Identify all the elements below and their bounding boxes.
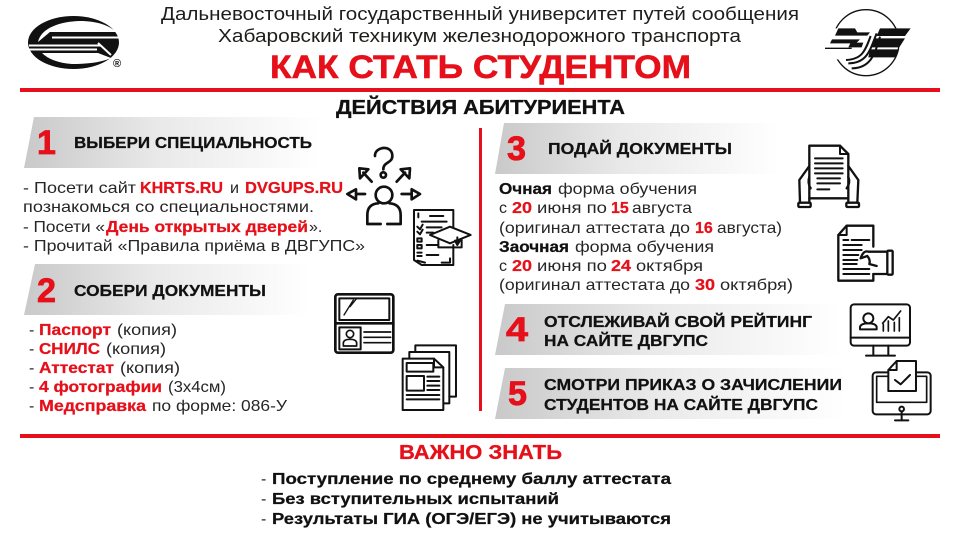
step 3 text: correspondence: июня по [537, 258, 607, 275]
step 2 list: СНИЛС [39, 341, 100, 358]
panel: step 3 [495, 123, 793, 294]
step 2 list: (3х4см) [168, 379, 226, 396]
panel: step 2 [24, 264, 310, 415]
step 3 text: full-time: августа [632, 200, 692, 217]
step 2 list: 4 фотографии [39, 379, 162, 396]
step 3 text: correspondence: Заочная [499, 239, 569, 256]
step 1 text [23, 180, 365, 255]
step 3 text: correspondence: 20 [512, 258, 532, 275]
step 2 list: - [29, 360, 34, 377]
number 5: 5 [508, 375, 527, 413]
header: university name [161, 4, 799, 46]
step 1 text: DVGUPS.RU [245, 180, 343, 197]
step 1 text: - Прочитай «Правила приёма в ДВГУПС» [23, 238, 365, 255]
step 1 text: познакомься со специальностями. [23, 199, 314, 216]
step 3 text: full-time: августа) [717, 220, 782, 237]
banner: step 3 [495, 123, 780, 174]
header: university name: Хабаровский техникум железнодорожного транспорта [218, 26, 742, 46]
logo: railway oval [28, 16, 121, 70]
step 4 heading [544, 312, 812, 350]
step 3 text: correspondence [499, 239, 793, 294]
step 2 list: по форме: 086-У [152, 398, 288, 415]
panel: step 5 [495, 368, 845, 419]
step 2 list [29, 322, 288, 415]
step 3 text: full-time: (оригинал аттестата до [499, 220, 690, 237]
step 2 list: (копия) [106, 341, 166, 358]
panel: step 1 [23, 117, 365, 255]
step 3 text: full-time: форма обучения [558, 181, 697, 198]
important facts list: - [261, 511, 266, 528]
icon: passport [335, 294, 393, 353]
step 3 text: full-time [499, 181, 782, 237]
step 1 text: День открытых дверей [106, 219, 308, 236]
vertical divider [479, 128, 482, 411]
step 1 heading: ВЫБЕРИ СПЕЦИАЛЬНОСТЬ [74, 135, 312, 152]
step 2 list: (копия) [120, 360, 180, 377]
banner: step 4 [495, 304, 840, 355]
step 2 list: - [29, 398, 34, 415]
icon: monitor with rating chart [851, 304, 910, 356]
step 3 text: full-time: с [499, 200, 507, 217]
important facts list: Без вступительных испытаний [272, 491, 559, 508]
icon: person choosing with question mark [347, 148, 420, 224]
step 3 text: correspondence: 30 [695, 277, 715, 294]
step 3 text: correspondence: форма обучения [575, 239, 714, 256]
step 3 text: correspondence: (оригинал аттестата до [499, 277, 690, 294]
step 3 text: correspondence: октября [636, 258, 703, 275]
icon: stack of documents [403, 345, 456, 410]
step 1 text: KHRTS.RU [140, 180, 223, 197]
step 2 heading: СОБЕРИ ДОКУМЕНТЫ [74, 283, 266, 300]
step 5 heading [544, 377, 842, 414]
logo: railway oval: ® [113, 58, 121, 70]
step 3 text: full-time: 15 [611, 200, 629, 217]
step 5 heading: СМОТРИ ПРИКАЗ О ЗАЧИСЛЕНИИ [544, 377, 842, 394]
panel: step 4 [495, 304, 840, 355]
step 3 text: full-time: 16 [695, 220, 713, 237]
important facts list: - [261, 471, 266, 488]
heading: important to know: ВАЖНО ЗНАТЬ [399, 442, 562, 464]
step 1 text: - Посети сайт [23, 180, 137, 197]
step 5 heading: СТУДЕНТОВ НА САЙТЕ ДВГУПС [544, 395, 818, 414]
step 1 text: ». [309, 219, 322, 236]
step 3 text: correspondence: октября) [720, 277, 793, 294]
icon: hands holding document [798, 146, 859, 207]
logo: railway circle [823, 10, 913, 76]
step 2 list: (копия) [117, 322, 177, 339]
number 4: 4 [506, 311, 528, 349]
step 2 list: Паспорт [39, 322, 111, 339]
banner: step 2 [24, 264, 310, 315]
important facts list: - [261, 491, 266, 508]
step 3 text: full-time: июня по [537, 200, 607, 217]
icon: hand with document [838, 226, 893, 281]
top divider [20, 88, 940, 92]
step 4 heading: НА САЙТЕ ДВГУПС [544, 331, 708, 350]
title: КАК СТАТЬ СТУДЕНТОМ [270, 49, 691, 85]
number 3: 3 [507, 130, 526, 168]
step 2 list: Медсправка [39, 398, 146, 415]
step 1 text: и [230, 180, 239, 197]
banner: step 5 [495, 368, 845, 419]
step 2 list: - [29, 379, 34, 396]
bottom divider [20, 434, 940, 438]
banner: step 1 [24, 117, 320, 168]
important facts list: Результаты ГИА (ОГЭ/ЕГЭ) не учитываются [272, 511, 671, 528]
icon: checklist with graduation cap [414, 210, 471, 265]
number 1: 1 [37, 124, 56, 162]
step 3 text: full-time: 20 [512, 200, 532, 217]
icon: monitor with approved document [873, 361, 931, 420]
important facts list: Поступление по среднему баллу аттестата [272, 471, 671, 488]
heading: applicant actions: ДЕЙСТВИЯ АБИТУРИЕНТА [336, 95, 625, 119]
important facts list [261, 471, 671, 528]
step 3 text: correspondence: 24 [611, 258, 631, 275]
step 4 heading: ОТСЛЕЖИВАЙ СВОЙ РЕЙТИНГ [544, 312, 812, 331]
step 2 list: - [29, 341, 34, 358]
step 3 heading: ПОДАЙ ДОКУМЕНТЫ [548, 139, 732, 158]
step 1 text: - Посети « [23, 219, 105, 236]
header: university name: Дальневосточный государственный университет путей сообщения [161, 4, 799, 24]
step 2 list: - [29, 322, 34, 339]
number 2: 2 [37, 272, 56, 310]
step 2 list: Аттестат [39, 360, 114, 377]
step 3 text: full-time: Очная [499, 181, 552, 198]
step 3 text: correspondence: с [499, 258, 507, 275]
